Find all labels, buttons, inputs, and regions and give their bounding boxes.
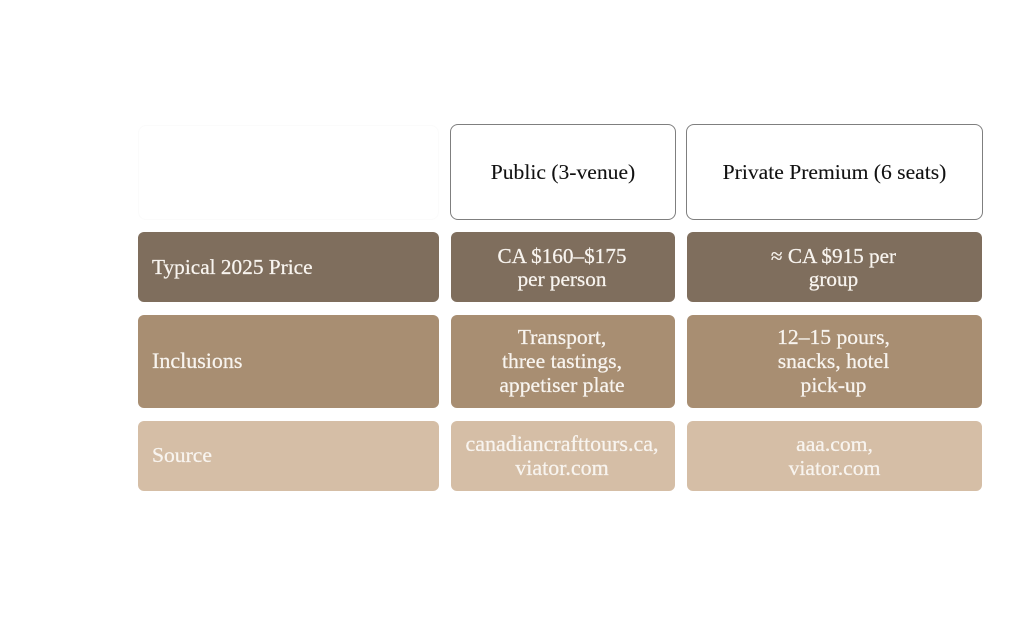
public inclusions: appetiser plate [499,373,625,397]
private inclusions: snacks, hotel [778,349,889,373]
row label: typical price: Typical 2025 Price [152,254,313,278]
column heading: public: Public (3-venue) [491,160,635,184]
private source: aaa.com, [796,432,873,456]
public source: viator.com [515,454,609,480]
row label: inclusions [138,315,439,408]
public price: per person [518,267,606,291]
public source: canadiancrafttours.ca, [466,430,658,456]
public price: CA $160–$175 [498,244,626,268]
public price [451,232,675,302]
row label: source: Source [152,443,212,467]
public inclusions: three tastings, [502,349,622,373]
public inclusions [451,315,675,408]
private price: group [809,267,858,291]
row label: inclusions: Inclusions [152,348,242,373]
private price [687,232,982,302]
row label: source [138,421,439,491]
private price: ≈ CA $915 per [771,244,896,268]
private inclusions: 12–15 pours, [777,325,890,349]
public source [451,421,675,491]
column heading: public [450,124,676,220]
private source [687,421,982,491]
row label: typical price [138,232,439,302]
private source: viator.com [789,456,880,480]
public inclusions: Transport, [518,325,606,349]
private inclusions: pick-up [801,373,866,397]
private inclusions [687,315,982,408]
column heading: private premium: Private Premium (6 seats) [723,160,946,184]
empty header cell [138,125,439,220]
column heading: private premium [686,124,983,220]
